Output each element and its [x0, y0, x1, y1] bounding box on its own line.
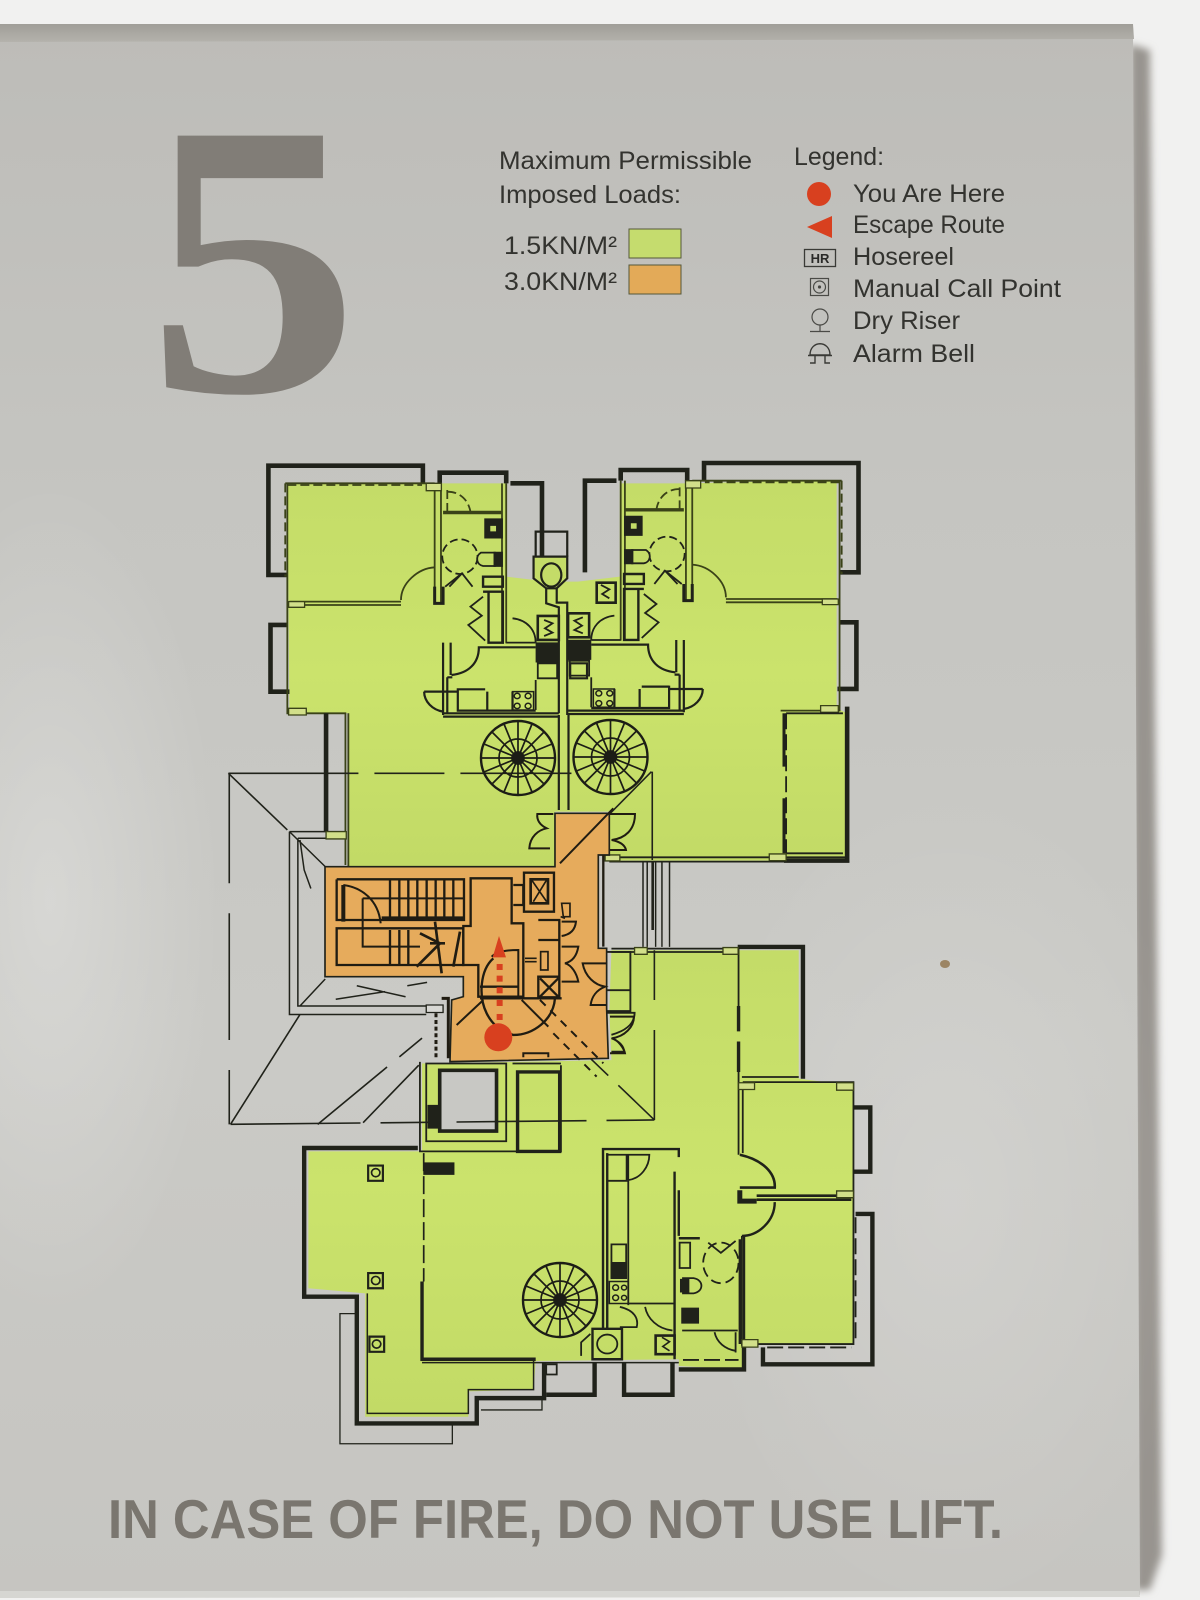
label: you are here: You Are Here: [853, 180, 1005, 208]
glass top edge: [0, 24, 1134, 42]
icon: escape route: [807, 216, 832, 238]
right bedrooms: [605, 948, 856, 1347]
left wing walls: [268, 466, 559, 717]
panel: legend: [794, 143, 1061, 368]
bathroom: [679, 1236, 744, 1369]
icon: dry riser: [810, 309, 830, 332]
label: manual call point: Manual Call Point: [853, 275, 1061, 303]
label: alarm bell: Alarm Bell: [853, 340, 975, 368]
plate shadow: [1130, 44, 1162, 1590]
icon: manual call point: [810, 278, 828, 296]
legend heading: Legend:: [794, 143, 884, 171]
loads heading: Maximum Permissible: [499, 147, 752, 175]
load 3.0 swatch: [629, 265, 681, 294]
you are here marker: [484, 1023, 512, 1051]
outer thin outline: [340, 1314, 542, 1444]
spiral stair right: [574, 720, 648, 794]
service door leaves right of core: [607, 952, 635, 1052]
lift and store walls: [420, 1062, 561, 1151]
core walls: [337, 808, 635, 1077]
floor number: 5: [147, 44, 359, 476]
label: escape route: Escape Route: [853, 211, 1005, 239]
escape route arrow head: [493, 936, 506, 957]
lift void: [441, 1070, 496, 1131]
escape route dashes: [497, 964, 503, 1020]
right wing walls (mirror): [568, 463, 859, 714]
left side wall: [289, 713, 348, 867]
spiral stair left: [481, 721, 555, 795]
light well lower: [289, 930, 443, 1014]
central duct: [534, 532, 616, 810]
panel: imposed loads key: [499, 147, 752, 296]
plan upper block: [228, 463, 859, 930]
plan lower block: [229, 930, 872, 1444]
balcony voids: [304, 947, 872, 1423]
lower green zone: [308, 950, 853, 1417]
load 3.0 label: 3.0KN/M²: [504, 268, 617, 296]
label: hosereel: Hosereel: [853, 243, 954, 271]
floor plan: [228, 463, 872, 1444]
mark on plate: [940, 960, 950, 968]
icon: hosereel: [804, 250, 836, 266]
lower right glare: [690, 780, 1200, 1600]
load 1.5 swatch: [629, 229, 681, 258]
core block: [325, 808, 635, 1077]
left glare: [0, 480, 220, 1320]
roof outline dashed: [228, 772, 652, 930]
loads heading: Imposed Loads:: [499, 181, 681, 209]
inner light well: [289, 832, 325, 930]
load 1.5 label: 1.5KN/M²: [504, 232, 617, 260]
icon: you are here: [807, 182, 831, 206]
left room walls and sockets: [367, 1153, 679, 1413]
loads heading: [499, 147, 752, 209]
shaft grey infill: [538, 533, 567, 557]
glass bottom edge: [0, 1591, 1140, 1598]
icon: hosereel: HR: [811, 251, 830, 266]
kitchen and service walls: [546, 1149, 679, 1374]
roof outline dashed lower: [229, 930, 670, 1124]
warning text: IN CASE OF FIRE, DO NOT USE LIFT.: [108, 1488, 1003, 1550]
orange core zone: [325, 813, 609, 1062]
wall pier near core: [436, 998, 448, 1058]
upper green zone: [287, 480, 847, 867]
upper right room and lower wall: [605, 707, 849, 930]
label: dry riser: Dry Riser: [853, 307, 960, 335]
spiral stair lower: [523, 1263, 597, 1337]
icon: alarm bell: [808, 344, 832, 363]
